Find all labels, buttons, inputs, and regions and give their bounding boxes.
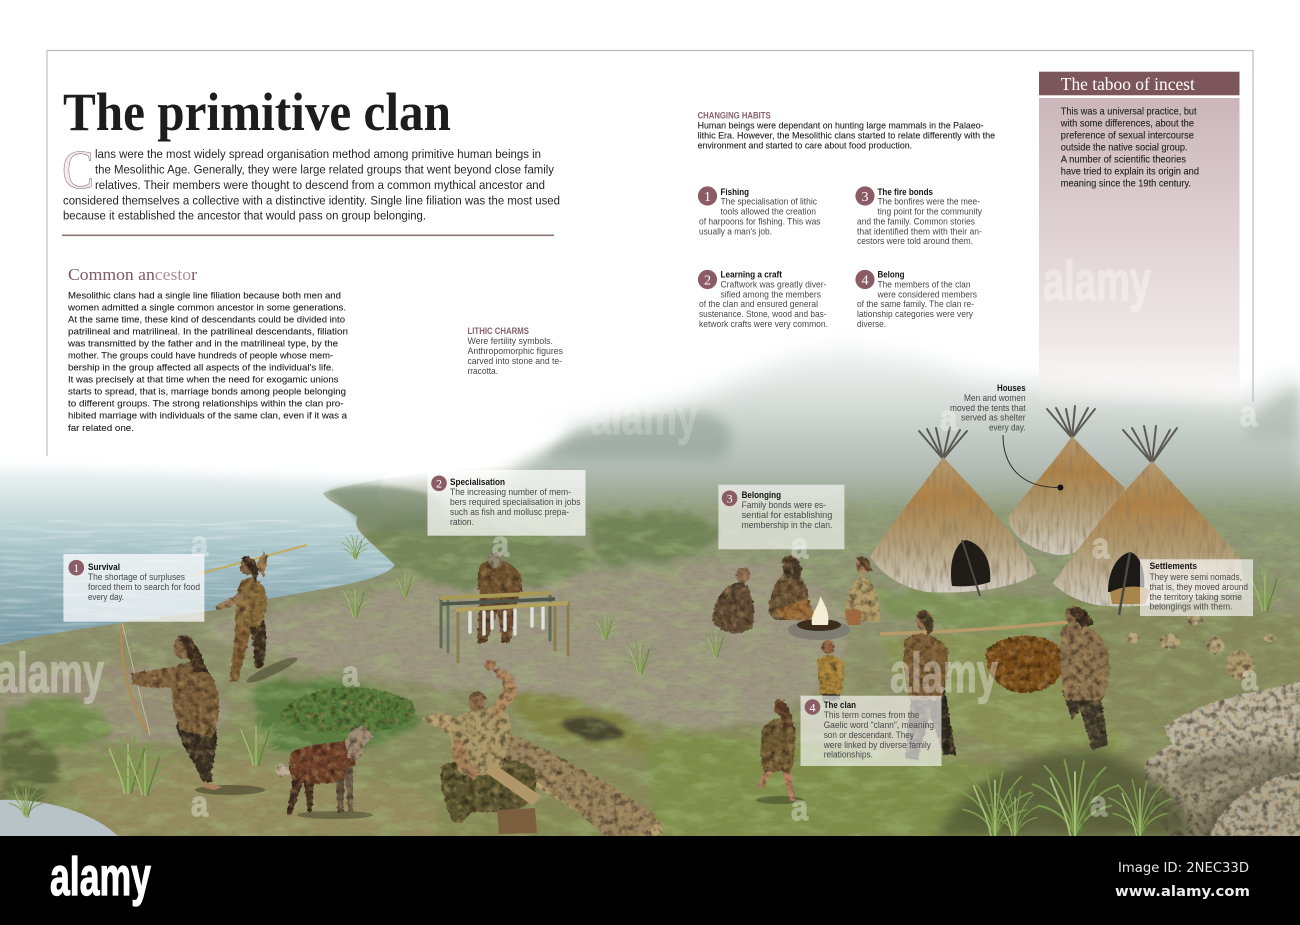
note: changing habits: CHANGING HABITS: [698, 110, 771, 120]
watermarks: a: [1090, 783, 1108, 824]
figure: hunter with spear: [195, 545, 307, 686]
item 3: the fire bonds: and the family. Common stories: [857, 216, 975, 226]
body text: was transmitted by the father and in the matrilineal type, by the: [67, 338, 338, 350]
callout: specialisation: [428, 470, 586, 536]
note: houses: [950, 383, 1026, 432]
note: lithic charms: rracotta.: [468, 366, 498, 376]
item 4: belong: Belong: [878, 270, 904, 280]
footer bar: [0, 836, 1300, 925]
note: lithic charms: Were fertility symbols.: [468, 336, 553, 346]
drying rack with fish: [440, 593, 568, 662]
figure: worker behind drying rack: [477, 552, 522, 643]
note: houses: every day.: [989, 422, 1026, 432]
panel: the taboo of incest: This was a universal practice, but: [1061, 106, 1197, 118]
intro paragraph: because it established the ancestor that would pass on group belonging.: [63, 209, 426, 223]
panel: the taboo of incest: meaning since the 19th century.: [1061, 178, 1191, 190]
item 2: learning a craft: ketwork crafts were very common.: [699, 319, 828, 329]
note: houses: moved the tents that: [950, 403, 1026, 413]
dog: [275, 726, 374, 819]
scattered stones: [1126, 615, 1276, 680]
callout: the clan: The clan: [824, 700, 856, 710]
callout: the clan: Gaelic word "clann", meaning: [824, 720, 934, 730]
callout: settlements: [1140, 559, 1253, 616]
callout: the clan: 4: [810, 700, 816, 714]
callout: belonging: sential for establishing: [742, 510, 832, 520]
item 3: the fire bonds: [855, 186, 982, 246]
intro paragraph: relatives. Their members were thought to descend from a common mythical ancestor and: [95, 178, 545, 192]
panel: the taboo of incest: have tried to explain its origin and: [1061, 166, 1199, 178]
page frame: [47, 50, 1253, 456]
callout: specialisation: bers required specialisation in jobs: [450, 497, 581, 507]
water: [0, 450, 400, 660]
footer logo: alamy: [50, 847, 151, 907]
fog over the shore: [0, 420, 570, 479]
panel: the taboo of incest: outside the native social group.: [1061, 142, 1188, 154]
body text: At the same time, these kind of descendants could be divided into: [68, 314, 345, 326]
callout: the clan: This term comes from the: [824, 710, 920, 720]
item 3: the fire bonds: that identified them with their an-: [857, 226, 982, 236]
intro paragraph: lans were the most widely spread organisation method among primitive human beings in: [95, 147, 541, 161]
title: The primitive clan: [63, 82, 451, 142]
note: changing habits: Human beings were dependant on hunting large mammals in the Palaeo-: [698, 120, 984, 132]
intro paragraph: the Mesolithic Age. Generally, they were large related groups that went beyond close family: [95, 162, 555, 176]
watermarks: a: [342, 653, 360, 694]
callout: survival: 1: [73, 561, 79, 575]
note: changing habits: [698, 110, 995, 152]
callout: settlements: that is, they moved around: [1150, 582, 1248, 592]
callout: belonging: 3: [727, 492, 733, 506]
body text: hibited marriage with individuals of the same clan, even if it was a: [68, 411, 348, 422]
item 1: fishing: [698, 186, 821, 236]
watermarks: a: [191, 783, 209, 824]
item 3: the fire bonds: cestors were told around them.: [857, 236, 973, 246]
callout: specialisation: The increasing number of mem-: [450, 487, 571, 497]
callout: belonging: membership in the clan.: [742, 520, 832, 530]
body text: mother. The groups could have hundreds of people whose mem-: [68, 350, 333, 362]
watermarks: alamy: [1043, 249, 1151, 312]
item 1: fishing: usually a man's job.: [699, 226, 772, 236]
image id: Image ID: 2NEC33D: [1118, 861, 1249, 876]
item 2: learning a craft: of the clan and ensured general: [699, 299, 818, 309]
green bush: [278, 688, 415, 733]
item 1: fishing: of harpoons for fishing. This was: [699, 216, 821, 226]
body text: It was precisely at that time when the need for exogamic unions: [68, 374, 339, 386]
watermarks: alamy: [890, 641, 998, 704]
callout: specialisation: 2: [436, 477, 442, 491]
foreground rocks: [1145, 682, 1300, 836]
item 1: fishing: 1: [704, 190, 711, 205]
item 4: belong: lationship categories were very: [857, 309, 973, 319]
tent: right: [1053, 426, 1245, 615]
callout: the clan: were linked by diverse family: [823, 740, 931, 750]
item 4: belong: 4: [862, 274, 868, 288]
figure: running child: [756, 699, 804, 804]
watermarks: a: [1092, 525, 1110, 566]
callout: survival: Survival: [88, 562, 120, 572]
section: common ancestor: [67, 265, 348, 434]
tent: back: [1008, 406, 1125, 555]
watermarks: [0, 249, 1259, 828]
intro paragraph: [62, 139, 560, 223]
intro rule: [62, 234, 554, 236]
note: lithic charms: LITHIC CHARMS: [468, 326, 529, 336]
note: changing habits: lithic Era. However, the Mesolithic clans started to relate differently with the: [698, 130, 995, 142]
body text: Mesolithic clans had a single line filiation because both men and: [68, 290, 341, 302]
intro paragraph: considered themselves a collective with a distinctive identity. Single line filiation was the most used: [63, 193, 560, 207]
panel: the taboo of incest: with some differences, about the: [1060, 118, 1194, 130]
item 4: belong: of the same family. The clan re-: [857, 299, 974, 309]
body text: women admitted a single common ancestor in some generations.: [67, 302, 346, 314]
grass tufts: [6, 535, 1288, 818]
callout: specialisation: Specialisation: [450, 477, 505, 487]
watermarks: a: [191, 523, 209, 564]
item 3: the fire bonds: 3: [862, 190, 868, 205]
body text: starts to spread, that is, marriage bonds among people belonging: [68, 386, 346, 398]
note: lithic charms: Anthropomorphic figures: [468, 346, 563, 356]
callout: settlements: belongings with them.: [1150, 601, 1232, 611]
item 4: belong: were considered members: [877, 289, 977, 299]
callout: survival: forced them to search for food: [88, 582, 200, 592]
note: houses: Houses: [997, 383, 1026, 393]
callout: survival: [63, 554, 204, 622]
watermarks: a: [1241, 657, 1259, 698]
panel: the taboo of incest: preference of sexual intercourse: [1061, 130, 1194, 142]
website: www.alamy.com: [1115, 884, 1250, 900]
item 1: fishing: Fishing: [720, 187, 749, 197]
heading: common ancestor: Common ancestor: [68, 265, 197, 284]
callout: belonging: [718, 485, 844, 549]
watermarks: a: [492, 523, 510, 564]
item 4: belong: diverse.: [857, 319, 886, 329]
callout: specialisation: such as fish and mollusc prepa-: [450, 507, 569, 517]
note: changing habits: environment and started to care about food production.: [698, 140, 912, 152]
figure: man splitting wood: [441, 660, 541, 834]
body text: to different groups. The strong relationships within the clan pro-: [68, 398, 344, 410]
watermarks: a: [791, 787, 809, 828]
figures carrying hunted animal: [880, 606, 1110, 760]
dark foreground grass: [936, 750, 1190, 836]
drop cap: C: [62, 139, 94, 200]
body text: far related one.: [68, 423, 134, 434]
callout: settlements: the territory taking some: [1150, 592, 1242, 602]
watermarks: a: [791, 525, 809, 566]
note: lithic charms: carved into stone and te-: [468, 356, 562, 366]
item 1: fishing: The specialisation of lithic: [720, 196, 817, 206]
figure: standing child: [817, 640, 845, 700]
watermarks: alamy: [0, 641, 104, 704]
leader line: houses: [1003, 435, 1063, 490]
item 2: learning a craft: [698, 270, 828, 329]
panel: the taboo of incest: [1039, 72, 1240, 402]
callout: settlements: They were semi nomads,: [1150, 572, 1242, 582]
item 2: learning a craft: Craftwork was greatly diver-: [720, 279, 827, 289]
callout: settlements: Settlements: [1150, 561, 1197, 571]
callout: belonging: Belonging: [742, 490, 781, 500]
body text: patrilineal and matrilineal. In the patrilineal descendants, filiation: [68, 326, 348, 338]
callout: the clan: [800, 696, 942, 766]
item 2: learning a craft: 2: [704, 274, 711, 288]
item 4: belong: The members of the clan: [878, 279, 970, 289]
watermarks: a: [1240, 393, 1258, 434]
callout: specialisation: ration.: [450, 517, 474, 527]
item 2: learning a craft: sified among the members: [720, 289, 821, 299]
watermarks: alamy: [590, 389, 698, 445]
watermarks: a: [940, 397, 958, 438]
item 3: the fire bonds: ting point for the community: [878, 206, 982, 216]
callout: the clan: relationships.: [824, 750, 873, 760]
callout: survival: every day.: [88, 592, 124, 602]
item 2: learning a craft: sustenance. Stone, wood and bas-: [699, 309, 826, 319]
note: houses: served as shelter: [961, 412, 1026, 422]
panel: the taboo of incest: A number of scientific theories: [1061, 154, 1186, 166]
body text: bership in the group affected all aspects of the individual's life.: [68, 362, 334, 374]
tent: left: [870, 427, 1037, 596]
note: houses: Men and women: [964, 393, 1026, 403]
callout: the clan: son or descendant. They: [824, 730, 914, 740]
item 4: belong: [855, 270, 977, 329]
figure: archer with bow: [121, 623, 265, 795]
panel: the taboo of incest: The taboo of incest: [1061, 74, 1195, 94]
illustration: Mesolithic clan settlement by the water: [0, 351, 1300, 836]
logs: [421, 712, 662, 836]
meadow ground: [0, 460, 1300, 836]
callout: survival: The shortage of surpluses: [88, 572, 185, 582]
item 1: fishing: tools allowed the creation: [720, 206, 816, 216]
item 3: the fire bonds: The fire bonds: [878, 187, 933, 197]
body text: [67, 290, 348, 434]
figures seated around the fire: [712, 555, 880, 640]
item 2: learning a craft: Learning a craft: [720, 270, 782, 280]
misty hills: [500, 351, 1300, 540]
vegetated bank beside the water: [326, 485, 445, 535]
item 3: the fire bonds: The bonfires were the mee-: [878, 196, 980, 206]
callout: belonging: Family bonds were es-: [742, 500, 826, 510]
note: lithic charms: [468, 326, 563, 376]
